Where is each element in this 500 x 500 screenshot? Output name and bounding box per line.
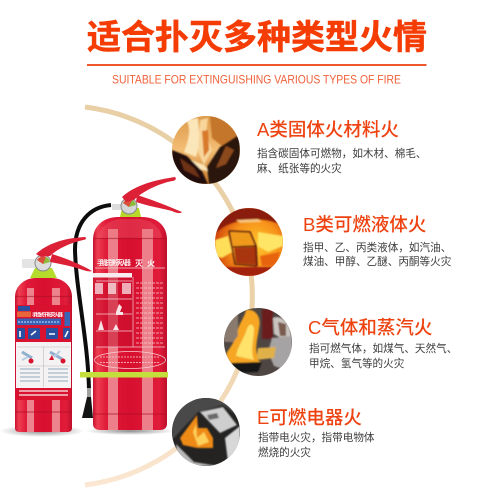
title: 适合扑灭多种类型火情	[87, 10, 427, 59]
large fire extinguisher	[75, 177, 182, 435]
small fire extinguisher	[0, 237, 92, 437]
fire E text: E可燃电器火	[257, 407, 362, 428]
cylinder	[93, 217, 167, 430]
printed label	[93, 258, 166, 368]
handle	[122, 177, 182, 213]
fire E text: 指带电火灾，指带电物体	[258, 431, 375, 444]
front label: 手提式干粉灭火器	[32, 310, 64, 318]
arc connecting the fire types	[85, 107, 252, 485]
collar	[30, 268, 57, 278]
collar	[120, 208, 141, 217]
fire photo E: electrical fire	[172, 398, 240, 466]
fire photo B: burning car	[215, 208, 283, 276]
pressure gauge	[112, 198, 137, 214]
fire photo A: burning wood	[172, 116, 240, 184]
fire E text: 燃烧的火灾	[258, 446, 311, 459]
fire E text	[257, 407, 375, 459]
fire C text: C气体和蒸汽火	[308, 317, 432, 338]
printed label: 手提式干粉灭火器	[97, 258, 131, 267]
hose	[75, 205, 111, 390]
nozzle	[82, 388, 93, 418]
fire A text: 指含碳固体可燃物，如木材、棉毛、	[257, 147, 426, 160]
fire C text: 甲烷、氢气等的火灾	[309, 357, 405, 370]
fire A text	[257, 119, 426, 175]
pressure gauge	[22, 255, 51, 271]
fire C text: 指可燃气体，如煤气、天然气、	[309, 342, 457, 355]
fire photo C: kitchen flame	[224, 308, 292, 376]
fire C text	[308, 317, 457, 370]
green strap	[80, 372, 168, 378]
fire B text: B类可燃液体火	[303, 214, 426, 235]
cylinder	[15, 278, 72, 432]
fire B text: 指甲、乙、丙类液体，如汽油、	[303, 241, 451, 254]
fire A text: A类固体火材料火	[257, 119, 399, 140]
front label	[16, 305, 71, 400]
fire B text	[303, 214, 452, 268]
handle	[36, 237, 92, 271]
fire A text: 麻、纸张等的火灾	[257, 162, 342, 175]
printed label: 灭火	[135, 259, 155, 268]
title underline	[87, 64, 426, 66]
fire B text: 煤油、甲醇、乙醚、丙酮等火灾	[303, 255, 452, 268]
subtitle: SUITABLE FOR EXTINGUISHING VARIOUS TYPES OF FIRE	[112, 72, 401, 86]
